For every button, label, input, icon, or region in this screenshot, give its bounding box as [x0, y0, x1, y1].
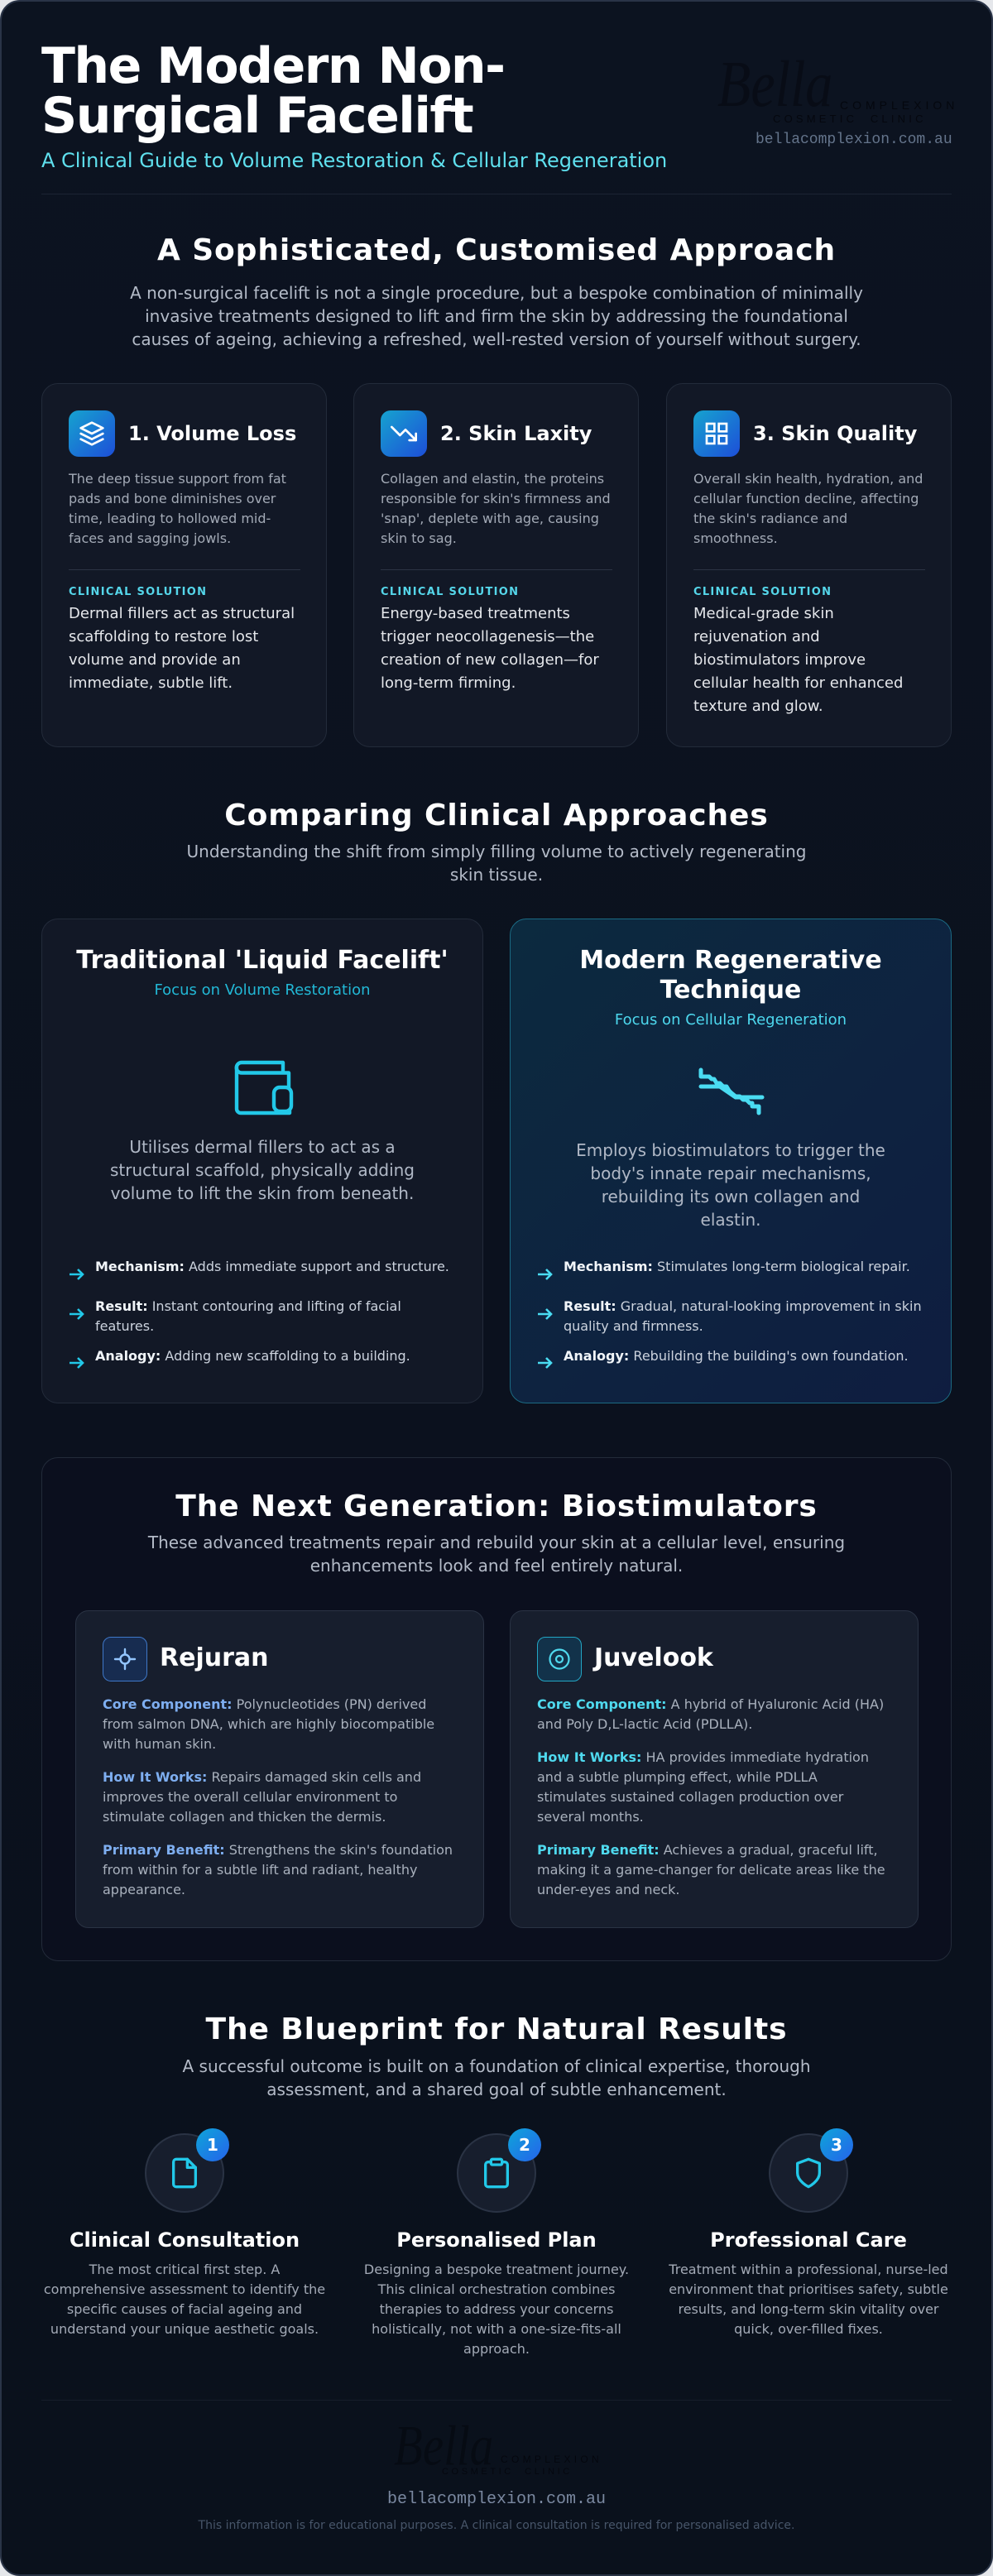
- step text: [665, 2260, 952, 2339]
- item: mechanism: Mechanism: Adds immediate support and structure.: [95, 1259, 449, 1274]
- icon: wallet: [235, 1061, 293, 1115]
- panel description: Utilises dermal fillers to act as a: [129, 1137, 396, 1157]
- how it works: [103, 1769, 421, 1825]
- step text: therapies to address your concerns: [380, 2301, 613, 2317]
- title: Surgical Facelift: [41, 87, 473, 145]
- item: result: quality and firmness.: [564, 1318, 703, 1334]
- how it works: [537, 1749, 869, 1825]
- panel description: Employs biostimulators to trigger the: [576, 1140, 885, 1160]
- heading: The Next Generation: Biostimulators: [175, 1489, 818, 1523]
- logo: Bella Complexion: [717, 49, 958, 125]
- card description: [68, 471, 286, 546]
- heading: The Blueprint for Natural Results: [206, 2012, 787, 2046]
- badge 2: 2: [519, 2135, 530, 2155]
- arrow: [70, 1269, 84, 1280]
- solution text: cellular health for enhanced: [693, 674, 903, 692]
- solution text: [693, 605, 903, 715]
- how it works: stimulate collagen and thicken the dermis.: [103, 1809, 386, 1825]
- intro text: skin tissue.: [450, 865, 543, 885]
- website url: bellacomplexion.com.au: [756, 132, 952, 148]
- panel description: structural scaffold, physically adding: [110, 1160, 415, 1180]
- icon: shield: [769, 2133, 848, 2213]
- solution text: Dermal fillers act as structural: [69, 605, 295, 622]
- panel description: volume to lift the skin from beneath.: [111, 1183, 414, 1203]
- card description: Overall skin health, hydration, and: [693, 471, 923, 487]
- intro text: assessment, and a shared goal of subtle enhancement.: [266, 2080, 727, 2099]
- subtitle: A Clinical Guide to Volume Restoration & Cellular Regeneration: [41, 149, 667, 172]
- step title: Personalised Plan: [396, 2228, 597, 2252]
- panel: the next generation biostimulators: [41, 1457, 952, 1961]
- logo: Bella Complexion: Bella: [717, 49, 832, 121]
- intro text: A non-surgical facelift is not a single procedure, but a bespoke combination of minimally: [130, 283, 863, 303]
- card description: time, leading to hollowed mid-: [69, 511, 271, 526]
- solution text: texture and glow.: [693, 698, 823, 715]
- how it works: How It Works: HA provides immediate hydration: [537, 1749, 869, 1765]
- intro text: A successful outcome is built on a foundation of clinical expertise, thorough: [182, 2056, 811, 2076]
- logo: Bella Complexion: [394, 2421, 601, 2487]
- list: key points: [70, 1259, 449, 1369]
- step text: quick, over-filled fixes.: [734, 2321, 883, 2337]
- intro text: invasive treatments designed to lift and firm the skin by addressing the foundational: [145, 306, 848, 326]
- solution text: [69, 605, 295, 692]
- solution text: long-term firming.: [381, 674, 516, 692]
- icon: dna strands: [698, 1067, 765, 1115]
- logo: Bella Complexion: COSMETIC CLINIC: [773, 113, 927, 125]
- card description: smoothness.: [693, 530, 778, 546]
- badge 3: [820, 2128, 853, 2161]
- logo: Bella Complexion: COSMETIC CLINIC: [442, 2467, 573, 2477]
- panel title: Technique: [660, 976, 801, 1005]
- item: analogy: Analogy: Rebuilding the building's own foundation.: [564, 1348, 909, 1364]
- panel subtitle: Focus on Cellular Regeneration: [615, 1011, 847, 1029]
- step text: specific causes of facial ageing and: [67, 2301, 302, 2317]
- arrow: [538, 1357, 553, 1369]
- card description: skin to sag.: [381, 530, 457, 546]
- card title: 2. Skin Laxity: [440, 422, 592, 445]
- solution text: Medical-grade skin: [693, 605, 834, 622]
- step text: [41, 2260, 328, 2339]
- panel title: Traditional 'Liquid Facelift': [76, 946, 449, 975]
- icon: layers: [69, 410, 115, 457]
- card title: Juvelook: [594, 1643, 713, 1672]
- footer: [2, 2401, 991, 2559]
- core component: from salmon DNA, which are highly biocompatible: [103, 1716, 434, 1732]
- arrow: [538, 1269, 553, 1280]
- badge 2: [508, 2128, 541, 2161]
- panel title: [579, 946, 882, 1005]
- card description: faces and sagging jowls.: [69, 530, 231, 546]
- card description: pads and bone diminishes over: [69, 491, 276, 506]
- solution label: CLINICAL SOLUTION: [693, 586, 832, 598]
- panel description: elastin.: [701, 1210, 760, 1230]
- step title: Professional Care: [710, 2228, 907, 2252]
- card: skin quality: [666, 383, 952, 747]
- section: comparing approaches: [41, 799, 952, 1403]
- panel description: [576, 1140, 885, 1230]
- solution text: trigger neocollagenesis—the: [381, 628, 594, 645]
- intro text: [187, 842, 806, 885]
- card description: [693, 471, 923, 546]
- step text: comprehensive assessment to identify the: [44, 2281, 325, 2297]
- heading: A Sophisticated, Customised Approach: [157, 233, 836, 267]
- how it works: several months.: [537, 1809, 644, 1825]
- primary benefit: making it a game-changer for delicate areas like the: [537, 1862, 885, 1878]
- item: result: [95, 1298, 401, 1334]
- item: result: Result: Instant contouring and lifting of facial: [95, 1298, 401, 1314]
- primary benefit: under-eyes and neck.: [537, 1882, 680, 1897]
- step text: results, and long-term skin vitality over: [678, 2301, 938, 2317]
- icon: trending down: [381, 410, 427, 457]
- card divider: [693, 569, 925, 570]
- solution text: biostimulators improve: [693, 651, 866, 669]
- step text: [353, 2260, 640, 2359]
- icon: target: [537, 1637, 582, 1681]
- list: key points: [538, 1259, 922, 1369]
- item: result: features.: [95, 1318, 154, 1334]
- arrow: [70, 1357, 84, 1369]
- website url: bellacomplexion.com.au: [387, 2490, 606, 2509]
- panel subtitle: Focus on Volume Restoration: [154, 981, 371, 999]
- panel: traditional liquid facelift: [41, 919, 483, 1403]
- card title: 3. Skin Quality: [753, 422, 917, 445]
- step 3: [665, 2127, 952, 2368]
- disclaimer: This information is for educational purposes. A clinical consultation is required for personalised advice.: [199, 2519, 794, 2532]
- badge 3: 3: [831, 2135, 842, 2155]
- panel description: body's innate repair mechanisms,: [590, 1163, 871, 1183]
- card divider: [381, 569, 612, 570]
- logo: Bella Complexion: COMPLEXION: [840, 98, 958, 112]
- card description: the skin's radiance and: [693, 511, 847, 526]
- intro text: causes of ageing, achieving a refreshed, well-rested version of yourself without surgery.: [132, 329, 861, 349]
- solution text: creation of new collagen—for: [381, 651, 599, 669]
- core component: [537, 1696, 884, 1732]
- solution text: immediate, subtle lift.: [69, 674, 233, 692]
- step text: understand your unique aesthetic goals.: [50, 2321, 319, 2337]
- icon: crosshair: [103, 1637, 147, 1681]
- arrow: [70, 1308, 84, 1320]
- icon: grid: [693, 410, 740, 457]
- how it works: stimulates sustained collagen production over: [537, 1789, 843, 1805]
- primary benefit: Primary Benefit: Achieves a gradual, graceful lift,: [537, 1842, 878, 1858]
- card divider: [69, 569, 300, 570]
- primary benefit: [537, 1840, 885, 1900]
- solution text: volume and provide an: [69, 651, 241, 669]
- step text: approach.: [463, 2341, 530, 2357]
- core component: Core Component: A hybrid of Hyaluronic Acid (HA): [537, 1696, 884, 1712]
- footer divider: [41, 2400, 952, 2401]
- card description: 'snap', deplete with age, causing: [381, 511, 599, 526]
- icon: clipboard: [457, 2133, 536, 2213]
- primary benefit: Primary Benefit: Strengthens the skin's foundation: [103, 1842, 453, 1858]
- item: mechanism: Mechanism: Stimulates long-term biological repair.: [564, 1259, 910, 1274]
- primary benefit: [103, 1842, 453, 1897]
- card: juvelook: [510, 1610, 919, 1928]
- core component: Core Component: Polynucleotides (PN) derived: [103, 1696, 426, 1712]
- solution text: scaffolding to restore lost: [69, 628, 258, 645]
- item: analogy: Analogy: Adding new scaffolding to a building.: [95, 1348, 410, 1364]
- card description: cellular function decline, affecting: [693, 491, 919, 506]
- title: [41, 37, 505, 145]
- card description: Collagen and elastin, the proteins: [381, 471, 604, 487]
- how it works: improves the overall cellular environment to: [103, 1789, 397, 1805]
- panel: modern regenerative technique: [510, 919, 952, 1403]
- section: customised approach: [41, 233, 952, 747]
- solution text: rejuvenation and: [693, 628, 820, 645]
- solution text: Energy-based treatments: [381, 605, 570, 622]
- core component: and Poly D,L-lactic Acid (PDLLA).: [537, 1716, 752, 1732]
- item: result: Result: Gradual, natural-looking improvement in skin: [564, 1298, 922, 1314]
- intro text: [130, 283, 863, 349]
- solution text: [381, 605, 599, 692]
- step text: Designing a bespoke treatment journey.: [364, 2262, 629, 2277]
- step text: holistically, not with a one-size-fits-all: [372, 2321, 621, 2337]
- logo: Bella Complexion: Bella: [394, 2415, 493, 2478]
- step text: environment that prioritises safety, subtle: [669, 2281, 948, 2297]
- intro text: [147, 1533, 845, 1576]
- heading: Comparing Clinical Approaches: [224, 799, 769, 832]
- logo: Bella Complexion: COMPLEXION: [501, 2454, 602, 2465]
- primary benefit: appearance.: [103, 1882, 185, 1897]
- primary benefit: from within for a subtle lift and radiant, healthy: [103, 1862, 417, 1878]
- card description: responsible for skin's firmness and: [381, 491, 611, 506]
- card: skin laxity: [353, 383, 639, 747]
- header: [41, 37, 958, 172]
- step title: Clinical Consultation: [70, 2228, 300, 2252]
- card description: The deep tissue support from fat: [69, 471, 286, 487]
- core component: with human skin.: [103, 1736, 216, 1752]
- core component: [103, 1696, 434, 1752]
- badge 1: [196, 2128, 229, 2161]
- intro text: Understanding the shift from simply filling volume to actively regenerating: [187, 842, 806, 861]
- how it works: and a subtle plumping effect, while PDLLA: [537, 1769, 818, 1785]
- card title: 1. Volume Loss: [128, 422, 296, 445]
- step 1: [41, 2127, 328, 2368]
- icon: document: [145, 2133, 224, 2213]
- intro text: These advanced treatments repair and rebuild your skin at a cellular level, ensuring: [148, 1533, 845, 1552]
- card title: Rejuran: [160, 1643, 268, 1672]
- badge 1: 1: [207, 2135, 218, 2155]
- solution label: CLINICAL SOLUTION: [381, 586, 519, 598]
- intro text: [2, 2055, 991, 2101]
- panel title: Modern Regenerative: [579, 946, 882, 975]
- step 2: [353, 2127, 640, 2368]
- title: The Modern Non-: [41, 37, 505, 95]
- step text: This clinical orchestration combines: [378, 2281, 615, 2297]
- card description: [381, 471, 611, 546]
- item: result: [564, 1298, 922, 1334]
- step text: Treatment within a professional, nurse-led: [669, 2262, 948, 2277]
- solution label: CLINICAL SOLUTION: [69, 586, 207, 598]
- how it works: How It Works: Repairs damaged skin cells and: [103, 1769, 421, 1785]
- intro text: enhancements look and feel entirely natural.: [310, 1556, 683, 1576]
- section: the blueprint: [2, 1996, 991, 2368]
- arrow: [538, 1308, 553, 1320]
- panel description: rebuilding its own collagen and: [602, 1187, 860, 1206]
- card: rejuran: [75, 1610, 484, 1928]
- panel description: [110, 1137, 415, 1203]
- step text: The most critical first step. A: [89, 2262, 280, 2277]
- card: volume loss: [41, 383, 327, 747]
